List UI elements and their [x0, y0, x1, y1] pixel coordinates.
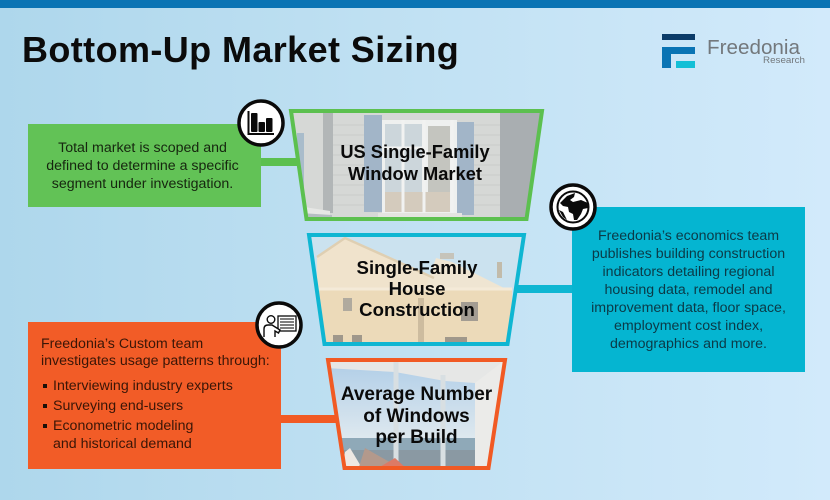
panel: orange description: and historical demand: [53, 436, 192, 452]
funnel label: tier 2: Single-Family: [357, 257, 477, 278]
title: Bottom-Up Market Sizing: [22, 29, 459, 70]
funnel tier 2: Single-Family House Construction: [306, 233, 526, 346]
panel: teal description: Freedonia’s economics team: [598, 228, 779, 244]
panel: orange description: [28, 322, 281, 469]
panel: green description: defined to determine a specific: [46, 158, 239, 174]
logo: Freedonia Research: Freedonia: [707, 37, 801, 59]
panel: orange description: Freedonia’s Custom team: [41, 336, 203, 352]
panel: orange description: investigates usage patterns through:: [41, 353, 270, 369]
icon: presenter with board: [255, 301, 303, 349]
icon: globe: [549, 183, 597, 231]
panel: orange description: Econometric modeling: [53, 418, 193, 434]
top bar: [0, 0, 830, 8]
panel: teal description: publishes building construction: [592, 246, 785, 262]
funnel label: tier 2: House: [389, 278, 445, 299]
funnel label: tier 3: per Build: [375, 427, 458, 448]
panel: teal description: housing data, remodel and: [604, 282, 772, 298]
funnel label: tier 3: of Windows: [363, 406, 470, 426]
icon: bar chart: [237, 99, 285, 147]
logo: Freedonia Research: Research: [763, 55, 805, 66]
funnel label: tier 1: [340, 141, 490, 184]
panel: teal description: demographics and more.: [610, 336, 767, 352]
funnel tier 1: US Single-Family Window Market: [288, 109, 544, 221]
funnel label: tier 1: US Single-Family: [340, 141, 490, 162]
funnel tier 3: Average Number of Windows per Build: [326, 358, 508, 470]
panel: green description: [28, 124, 261, 207]
panel: teal description: indicators detailing regional: [603, 264, 774, 280]
panel: orange description: Interviewing industry experts: [53, 378, 233, 394]
funnel label: tier 1: Window Market: [348, 163, 482, 184]
funnel label: tier 2: [357, 257, 478, 320]
panel: teal description: employment cost index,: [614, 318, 763, 334]
funnel label: tier 3: [341, 384, 492, 448]
panel: green description: Total market is scoped and: [58, 140, 227, 156]
panel: orange description: Surveying end-users: [53, 398, 183, 414]
panel: green description: segment under investigation.: [52, 176, 233, 192]
panel: teal description: improvement data, floor space,: [591, 300, 786, 316]
panel: teal description: [572, 207, 805, 372]
logo: Freedonia Research: [662, 34, 805, 68]
funnel label: tier 3: Average Number: [341, 384, 492, 405]
funnel label: tier 2: Construction: [359, 299, 475, 320]
